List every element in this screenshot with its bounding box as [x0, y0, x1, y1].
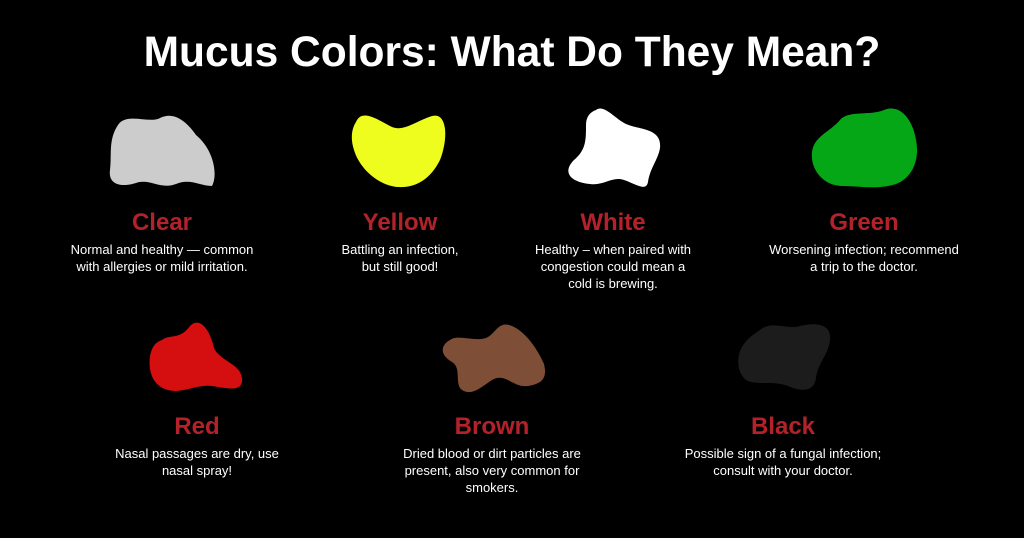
icon: white blob [568, 109, 660, 187]
panel: clear: Normal and healthy — common [71, 242, 253, 257]
panel: green [769, 209, 959, 274]
panel: yellow: but still good! [362, 259, 438, 274]
panel: yellow: Battling an infection, [341, 242, 459, 257]
panel: yellow [341, 209, 459, 274]
panel: brown: Brown [455, 413, 529, 440]
panel: black: Possible sign of a fungal infection; [685, 446, 881, 461]
panel: brown: smokers. [466, 480, 518, 495]
panel: clear [71, 209, 253, 274]
icon: yellow blob [352, 116, 445, 187]
panel: green: Worsening infection; recommend [769, 242, 959, 257]
panel: white: congestion could mean a [541, 259, 685, 274]
panel: yellow: Yellow [363, 209, 437, 236]
panel: red: Red [174, 413, 220, 440]
panel: clear: Clear [132, 209, 192, 236]
icon: red blob [150, 323, 242, 391]
panel: green: a trip to the doctor. [810, 259, 918, 274]
panel: black: Black [751, 413, 815, 440]
panel: red: Nasal passages are dry, use [115, 446, 279, 461]
panel: brown: Dried blood or dirt particles are [403, 446, 581, 461]
panel: brown: present, also very common for [405, 463, 579, 478]
icon: brown blob [443, 325, 545, 392]
panel: black [685, 413, 881, 478]
panel: clear: with allergies or mild irritation. [76, 259, 248, 274]
panel: black: consult with your doctor. [713, 463, 853, 478]
icon: clear blob [110, 116, 215, 186]
panel: white [535, 209, 691, 291]
panel: brown [403, 413, 581, 495]
panel: red [115, 413, 279, 478]
panel: green: Green [829, 209, 899, 236]
panel: red: nasal spray! [162, 463, 232, 478]
panel: white: cold is brewing. [568, 276, 658, 291]
panel: white: Healthy – when paired with [535, 242, 691, 257]
icon: black blob [738, 324, 830, 390]
panel: white: White [580, 209, 646, 236]
icon: green blob [812, 108, 917, 187]
title: Mucus Colors: What Do They Mean? [144, 29, 880, 76]
